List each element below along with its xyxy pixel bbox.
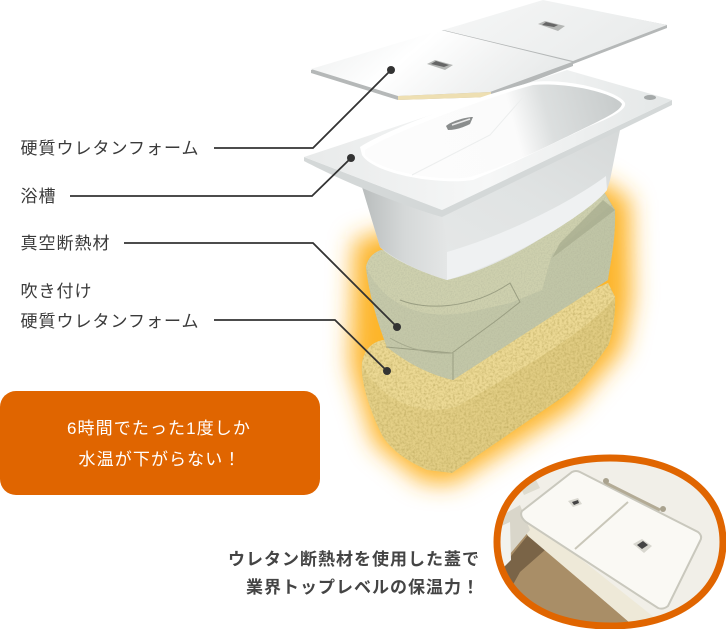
photo: bathtub with lid in circular frame [494, 455, 726, 629]
caption: lid heat retention: 業界トップレベルの保温力！ [246, 578, 480, 597]
label: sprayed rigid urethane foam: 吹き付け [20, 282, 92, 301]
leader line: sprayed urethane foam [214, 320, 391, 375]
leader line: vacuum insulation [124, 243, 401, 331]
orange heat glow [350, 180, 632, 484]
callout: water temperature: 水温が下がらない！ [79, 450, 241, 469]
label: bathtub: 浴槽 [20, 187, 56, 206]
callout: water temperature [0, 391, 320, 495]
caption: lid heat retention: ウレタン断熱材を使用した蓋で [228, 550, 480, 569]
lid: right panel [443, 0, 667, 64]
insulation layer: green vacuum insulation [366, 190, 615, 380]
foam layer: yellow sprayed urethane [362, 283, 615, 473]
leader line: bathtub [70, 154, 355, 196]
bathtub exploded diagram [304, 0, 672, 473]
label: sprayed rigid urethane foam [20, 282, 199, 331]
caption: lid heat retention [228, 550, 480, 597]
lid: left panel with foam cut edge [311, 30, 573, 100]
bathtub body [304, 70, 672, 280]
label: sprayed rigid urethane foam: 硬質ウレタンフォーム [20, 312, 199, 331]
label: vacuum insulation: 真空断熱材 [20, 234, 110, 253]
callout: water temperature: 6時間でたった1度しか [67, 419, 251, 438]
leader line: lid urethane foam [214, 66, 395, 148]
label: lid urethane foam: 硬質ウレタンフォーム [20, 139, 199, 158]
